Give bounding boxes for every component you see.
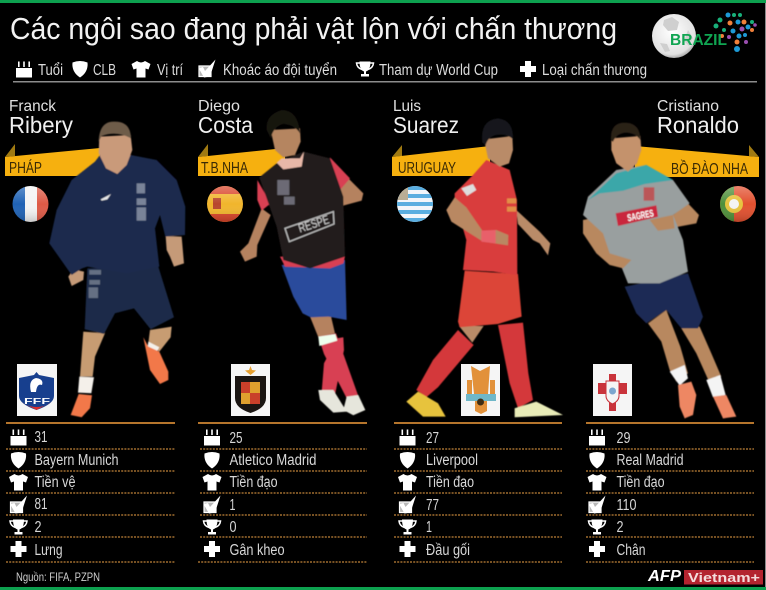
name: Diego Costa: Costa	[198, 112, 254, 138]
icon: World Cup	[399, 520, 416, 534]
name: Cristiano Ronaldo: Ronaldo	[657, 112, 739, 138]
value: club: Real Madrid	[616, 452, 684, 469]
ribbon: Portugal: BỒ ĐÀO NHA	[671, 160, 749, 178]
value: injury: Lưng	[34, 542, 62, 559]
player: Ronaldo	[583, 123, 736, 418]
stats: Ronaldo	[586, 423, 754, 562]
icon: World Cup	[588, 520, 606, 534]
icon: injury	[589, 541, 605, 557]
flag: Spain	[207, 186, 243, 222]
icon: club	[204, 452, 220, 468]
icon: age	[589, 430, 605, 446]
value: World Cup: 2	[616, 519, 624, 536]
value: World Cup: 0	[230, 519, 237, 536]
value: age: 29	[616, 430, 630, 447]
icon: World Cup	[10, 520, 27, 534]
legend item: position	[132, 61, 184, 79]
ribbon: France: PHÁP	[9, 160, 42, 177]
legend item: club: CLB	[93, 62, 116, 79]
icon: caps	[204, 496, 220, 514]
player: Costa: RESPE	[297, 212, 331, 236]
player: Ribery	[49, 122, 185, 417]
legend item: age: Tuổi	[38, 62, 63, 79]
panel: Costa	[198, 98, 367, 562]
legend item: injury	[520, 61, 647, 79]
top green bar	[0, 0, 766, 3]
value: caps: 81	[34, 496, 48, 513]
logo: Vietnam+: Vietnam+	[688, 570, 760, 585]
value: age: 25	[230, 430, 242, 447]
title: Các ngôi sao đang phải vật lộn với chấn thương	[10, 12, 617, 46]
player: Costa	[240, 110, 365, 415]
value: position: Tiền vệ	[34, 474, 76, 491]
value: position: Tiền đạo	[426, 474, 474, 491]
icon: caps	[399, 496, 416, 514]
icon: position	[398, 474, 417, 490]
icon: club	[400, 452, 415, 468]
logo: Brazil	[652, 12, 757, 58]
icon: injury	[10, 541, 26, 557]
legend item: age	[16, 62, 63, 79]
icon: position	[9, 474, 28, 490]
name: Diego Costa: Diego	[198, 98, 240, 115]
flag: France	[12, 186, 50, 222]
name: Cristiano Ronaldo	[657, 98, 739, 138]
flag: Uruguay	[397, 186, 433, 222]
value: injury: Chân	[616, 542, 646, 559]
legend item: injury: Loại chấn thương	[542, 62, 647, 79]
ribbon: Spain	[198, 144, 285, 177]
value: club: Atletico Madrid	[230, 452, 316, 469]
name: Franck Ribery: Franck	[9, 98, 57, 115]
ribbon: Portugal	[635, 145, 759, 178]
icon: age	[10, 430, 26, 446]
crest: Portugal	[593, 364, 632, 416]
value: World Cup: 2	[34, 519, 42, 536]
name: Franck Ribery	[9, 98, 73, 138]
value: caps: 1	[230, 497, 236, 514]
flag: Portugal	[720, 186, 756, 222]
name: Diego Costa	[198, 98, 254, 138]
ribbon: Uruguay: URUGUAY	[398, 160, 456, 177]
name: Franck Ribery: Ribery	[9, 112, 73, 138]
value: position: Tiền đạo	[616, 474, 664, 491]
stats: Costa	[198, 423, 367, 562]
stats: Suarez	[394, 423, 562, 562]
player: Suarez	[406, 118, 563, 417]
bottom green bar	[0, 587, 766, 590]
ribbon: France	[5, 144, 100, 177]
icon: injury	[400, 541, 416, 557]
value: age: 31	[34, 429, 48, 446]
value: age: 27	[426, 430, 439, 447]
icon: position	[588, 474, 606, 490]
icon: club	[589, 452, 605, 468]
icon: World Cup	[204, 520, 220, 534]
player: Ronaldo: SAGRES	[626, 208, 655, 224]
icon: caps	[10, 496, 27, 514]
crest: Spain	[231, 364, 270, 416]
value: club: Bayern Munich	[34, 452, 118, 469]
name: Cristiano Ronaldo: Cristiano	[657, 98, 719, 115]
ribbon: Uruguay	[392, 145, 490, 177]
ribbon: Spain: T.B.NHA	[201, 160, 249, 177]
panel: Ribery	[5, 98, 185, 562]
name: Luis Suarez: Suarez	[393, 112, 459, 138]
panel: Suarez	[392, 98, 563, 562]
value: injury: Gân kheo	[230, 542, 284, 559]
source: Nguồn: FIFA, PZPN	[16, 570, 100, 584]
value: club: Liverpool	[426, 452, 478, 469]
icon: position	[202, 474, 222, 490]
value: World Cup: 1	[426, 519, 432, 536]
legend item: caps	[198, 60, 337, 79]
logo: Brazil: BRAZIL	[670, 32, 727, 49]
name: Luis Suarez	[393, 98, 459, 138]
legend item: club	[72, 61, 116, 79]
icon: age	[400, 430, 416, 446]
right edge line	[765, 3, 766, 587]
legend item: World Cup: Tham dự World Cup	[379, 62, 498, 79]
panel: Ronaldo	[583, 98, 759, 562]
icon: age	[204, 430, 220, 446]
legend item: position: Vị trí	[157, 62, 184, 79]
crest: Uruguay	[461, 364, 500, 416]
value: injury: Đầu gối	[426, 542, 470, 559]
crest: France: FFF	[24, 397, 50, 406]
logo: AFP: AFP	[647, 568, 681, 585]
icon: injury	[204, 541, 220, 557]
icon: caps	[588, 496, 606, 514]
value: caps: 110	[616, 497, 637, 514]
value: position: Tiền đạo	[230, 474, 278, 491]
name: Luis Suarez: Luis	[393, 98, 421, 115]
value: caps: 77	[426, 497, 439, 514]
crest: France	[17, 364, 57, 416]
icon: club	[11, 452, 26, 468]
legend	[16, 60, 647, 79]
legend item: caps: Khoác áo đội tuyển	[223, 62, 337, 79]
stats: Ribery	[6, 423, 175, 562]
